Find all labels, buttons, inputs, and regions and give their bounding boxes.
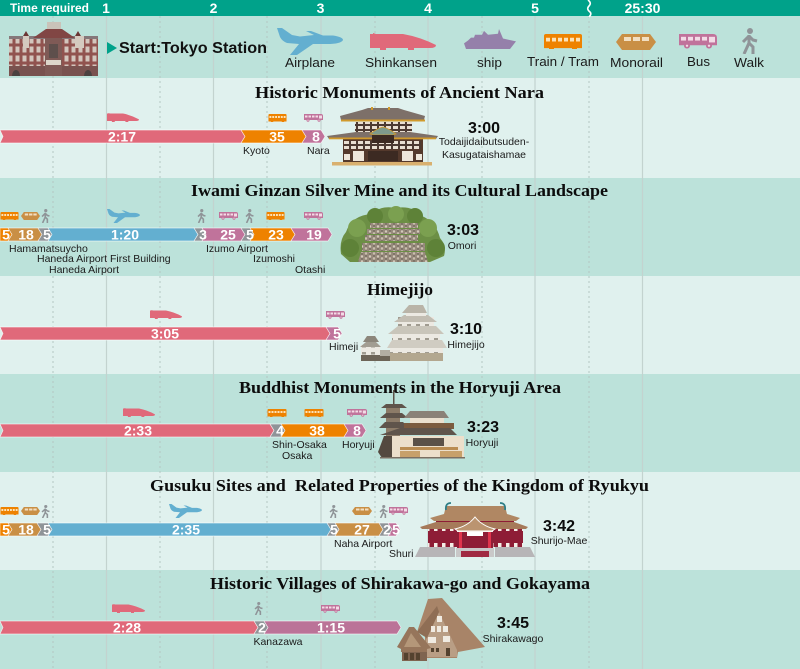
stop labels: Iwami Ginzan <box>9 243 325 276</box>
route bar: Horyuji: 8 <box>353 422 361 438</box>
time grid lines <box>53 16 642 669</box>
start label: Start:Tokyo Station <box>119 40 267 57</box>
legend: airplane: Airplane <box>285 55 335 70</box>
stop labels: Ryukyu <box>334 538 414 560</box>
travel time: Ryukyu <box>531 518 587 547</box>
travel time: Horyuji: 3:23 <box>467 419 499 436</box>
icon: gassho farmhouse <box>397 598 485 661</box>
route bar: Shirakawa-go: 1:15 <box>317 620 345 636</box>
route bar: Ryukyu <box>0 522 400 538</box>
panel: Himejijo <box>0 280 485 361</box>
route bar: Iwami Ginzan: 5 <box>246 226 254 242</box>
travel time: Himejijo: Himejijo <box>447 339 485 351</box>
travel time: Nara: Todaijidaibutsuden- <box>439 136 530 148</box>
travel time: Iwami Ginzan: 3:03 <box>447 222 479 239</box>
stop labels: Horyuji: Shin-Osaka <box>272 439 327 451</box>
stop labels: Iwami Ginzan: Otashi <box>295 264 325 276</box>
travel time: Shirakawa-go: 3:45 <box>497 615 529 632</box>
route icons: Himejijo <box>150 310 345 319</box>
icon: Shuri Castle <box>415 503 535 557</box>
route bar: Horyuji <box>0 422 366 438</box>
travel time: Horyuji <box>466 419 499 449</box>
header bar: time required scale: 1 <box>102 0 110 16</box>
header bar: time required scale: Time required <box>10 3 89 15</box>
header bar: time required scale: 5 <box>531 0 539 16</box>
panel: Horyuji <box>0 378 562 462</box>
panel: Iwami Ginzan <box>0 181 608 276</box>
icon: Horyuji temple <box>378 390 465 458</box>
route bar: Iwami Ginzan: 19 <box>306 226 322 242</box>
legend: ship <box>464 29 516 70</box>
stop labels: Iwami Ginzan: Haneda Airport First Building <box>37 253 171 265</box>
legend: ship: ship <box>477 55 502 70</box>
header bar: time required scale: 25:30 <box>625 0 661 16</box>
stop label: Kanazawa: Kanazawa <box>253 636 303 648</box>
legend: train and tram: Train / Tram <box>527 54 599 69</box>
route bar: Ryukyu: 5 <box>2 522 10 538</box>
heading: Iwami Ginzan: Iwami Ginzan Silver Mine and its Cultural Landscape <box>191 181 608 200</box>
route bar: Himejijo <box>0 326 342 342</box>
travel time: Iwami Ginzan <box>447 222 479 252</box>
route bar: Nara: 8 <box>312 128 320 144</box>
route bar: Iwami Ginzan: 1:20 <box>111 226 139 242</box>
stop labels: Nara <box>243 145 330 157</box>
route icons: Shirakawa-go <box>112 602 340 615</box>
route bar: Iwami Ginzan: 23 <box>268 226 284 242</box>
icon: Todaiji temple <box>327 107 438 166</box>
route bar: Himejijo: 3:05 <box>151 326 179 342</box>
route bar: Ryukyu: 5 <box>330 522 338 538</box>
legend: airplane <box>277 28 343 70</box>
route bar: Ryukyu: 2 <box>383 522 391 538</box>
route bar: Ryukyu: 18 <box>18 522 34 538</box>
icon: Himeji Castle <box>360 305 447 361</box>
route bar: Iwami Ginzan: 18 <box>18 226 34 242</box>
route bar: Horyuji: 2:33 <box>124 422 152 438</box>
icon: Iwami Ginzan silver mine <box>341 206 445 262</box>
legend: shinkansen: Shinkansen <box>365 55 437 70</box>
route bar: Horyuji: 4 <box>276 422 284 438</box>
header bar: time required scale: 3 <box>317 0 325 16</box>
route bar: Shirakawa-go <box>0 620 401 636</box>
header bar: time required scale <box>0 0 800 17</box>
travel time: Himejijo <box>447 321 485 351</box>
legend: shinkansen <box>365 33 437 70</box>
route bar: Nara: 35 <box>269 128 285 144</box>
legend: bus: Bus <box>687 54 711 69</box>
route icons: Nara <box>107 113 323 122</box>
travel time: Horyuji: Horyuji <box>466 437 498 449</box>
stop labels: Iwami Ginzan: Izumoshi <box>253 253 295 265</box>
stop labels: Iwami Ginzan: Izumo Airport <box>206 243 268 255</box>
stop labels: Horyuji: Osaka <box>282 450 313 462</box>
stop labels: Nara: Nara <box>307 145 330 157</box>
route bar: Shirakawa-go: 2 <box>258 620 266 636</box>
route icons: Iwami Ginzan <box>0 209 323 223</box>
route bar: Ryukyu: 5 <box>43 522 51 538</box>
travel time: Nara <box>439 120 530 161</box>
stop label: Himeji: Himeji <box>329 341 358 353</box>
header bar: time required scale: 2 <box>210 0 218 16</box>
heading: Himejijo: Himejijo <box>367 280 433 299</box>
route bar: Shirakawa-go: 2:28 <box>113 620 141 636</box>
route bar: Iwami Ginzan: 3 <box>199 226 207 242</box>
route bar: Nara <box>0 128 325 144</box>
heading: Ryukyu: Gusuku Sites and Related Properties of the Kingdom of Ryukyu <box>150 476 649 495</box>
route icons: Horyuji <box>123 408 367 417</box>
stop labels: Iwami Ginzan: Hamamatsuycho <box>9 243 88 255</box>
route bar: Iwami Ginzan: 5 <box>2 226 10 242</box>
stop labels: Iwami Ginzan: Haneda Airport <box>49 264 119 276</box>
stop labels: Horyuji <box>272 439 375 462</box>
header bar: time required scale: 4 <box>424 0 432 16</box>
route bar: Iwami Ginzan: 5 <box>43 226 51 242</box>
panel: Ryukyu <box>0 476 649 560</box>
legend: walk <box>734 28 765 70</box>
stop labels: Nara: Kyoto <box>243 145 270 157</box>
travel time: Iwami Ginzan: Omori <box>448 240 476 252</box>
route icons: Ryukyu <box>0 504 408 518</box>
legend: monorail: Monorail <box>610 55 663 70</box>
legend: bus <box>679 34 717 69</box>
legend: walk: Walk <box>734 55 765 70</box>
route bar: Iwami Ginzan <box>0 226 332 242</box>
heading: Shirakawa-go: Historic Villages of Shirakawa-go and Gokayama <box>210 574 591 593</box>
route bar: Iwami Ginzan: 25 <box>220 226 236 242</box>
travel time: Ryukyu: 3:42 <box>543 518 575 535</box>
route bar: Nara: 2:17 <box>108 128 136 144</box>
legend: train and tram <box>527 34 599 69</box>
route bar: Ryukyu: 5 <box>392 522 400 538</box>
heading: Horyuji: Buddhist Monuments in the Horyuji Area <box>239 378 562 397</box>
route bar: Ryukyu: 2:35 <box>172 522 200 538</box>
route bar: Horyuji: 38 <box>309 422 325 438</box>
panel: Shirakawa-go <box>0 574 591 661</box>
travel time: Shirakawa-go <box>483 615 544 645</box>
travel time: Nara: 3:00 <box>468 120 500 137</box>
travel time: Nara: Kasugataishamae <box>442 149 526 161</box>
travel time: Himejijo: 3:10 <box>450 321 482 338</box>
heading: Nara: Historic Monuments of Ancient Nara <box>255 83 545 102</box>
travel time: Ryukyu: Shurijo-Mae <box>531 535 587 547</box>
stop labels: Ryukyu: Shuri <box>389 548 414 560</box>
stop labels: Ryukyu: Naha Airport <box>334 538 392 550</box>
panel: Nara <box>0 83 545 166</box>
stop labels: Horyuji: Horyuji <box>342 439 375 451</box>
route bar: Himejijo: 5 <box>333 326 341 342</box>
legend: monorail <box>610 34 663 70</box>
legend: transport modes <box>277 28 765 70</box>
icon: Tokyo Station building <box>9 22 98 76</box>
route bar: Ryukyu: 27 <box>354 522 370 538</box>
travel time: Shirakawa-go: Shirakawago <box>483 633 544 645</box>
